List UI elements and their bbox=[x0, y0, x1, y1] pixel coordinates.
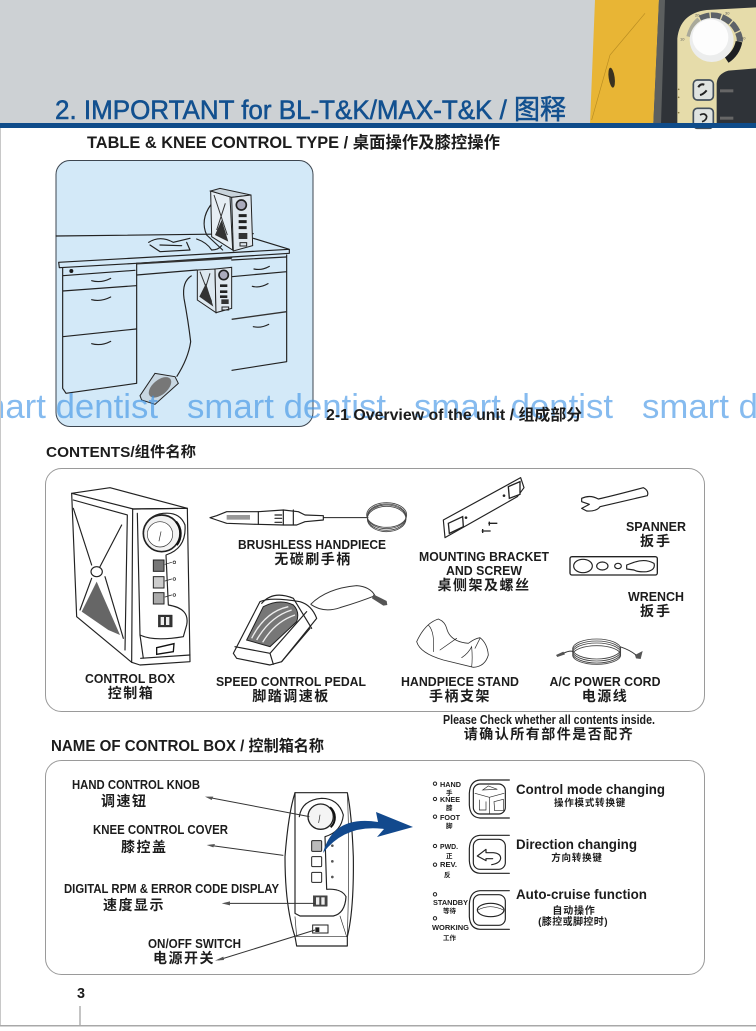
label: mounting bracket: MOUNTING BRACKET bbox=[419, 550, 549, 564]
note: check contents bbox=[443, 713, 655, 742]
handpiece drawing bbox=[210, 503, 407, 532]
label: spanner: SPANNER bbox=[626, 520, 686, 534]
control mode changing group: Control mode changing bbox=[516, 782, 665, 797]
label: power cord bbox=[550, 675, 660, 704]
indicators bbox=[433, 782, 437, 818]
label: on/off switch bbox=[148, 937, 241, 966]
pedal drawing bbox=[233, 586, 387, 665]
label: hand control knob: HAND CONTROL KNOB bbox=[72, 778, 200, 792]
header band bbox=[0, 0, 756, 128]
icon: auto-cruise button bbox=[469, 891, 509, 929]
auto-cruise function group: 工作 bbox=[443, 933, 456, 942]
panel: name of control box bbox=[46, 760, 704, 974]
control mode changing group bbox=[433, 780, 665, 830]
label: wrench: 扳手 bbox=[640, 603, 672, 619]
auto-cruise function group: Auto-cruise function bbox=[516, 887, 647, 902]
control mode changing group: 操作模式转换键 bbox=[554, 797, 626, 809]
label: wrench: WRENCH bbox=[628, 590, 684, 604]
direction changing group: PWD. bbox=[440, 842, 458, 851]
photo of control unit: 20 bbox=[695, 13, 700, 18]
label: power cord: A/C POWER CORD bbox=[550, 675, 660, 689]
heading: contents: CONTENTS/组件名称 bbox=[46, 443, 197, 461]
label: hand control knob: 调速钮 bbox=[101, 793, 148, 809]
power cord drawing bbox=[556, 639, 643, 664]
label: knee control cover: 膝控盖 bbox=[121, 839, 168, 855]
control box drawing bbox=[72, 488, 190, 665]
label: handpiece stand bbox=[401, 675, 519, 704]
label: speed control pedal bbox=[216, 675, 366, 704]
icon: control mode button bbox=[469, 780, 509, 818]
page number: 3 bbox=[77, 985, 85, 1002]
label: digital display: 速度显示 bbox=[103, 897, 165, 913]
direction changing group: REV. bbox=[440, 860, 457, 869]
blue rule bbox=[0, 123, 756, 128]
label: power cord: 电源线 bbox=[582, 688, 628, 704]
auto-cruise function group: STANDBY bbox=[433, 898, 468, 907]
label: on/off switch: 电源开关 bbox=[153, 950, 215, 966]
label: knee control cover bbox=[93, 823, 228, 855]
title: 2. IMPORTANT for BL-T&K/MAX-T&K / 图释 bbox=[55, 95, 566, 125]
label: spanner bbox=[626, 520, 686, 549]
auto-cruise function group: WORKING bbox=[432, 923, 469, 932]
auto-cruise function group: 自动操作 bbox=[552, 904, 596, 917]
photo of control unit: 30 bbox=[725, 11, 730, 16]
photo of control unit: 10 bbox=[680, 37, 685, 42]
handpiece on desk bbox=[149, 238, 222, 252]
direction changing group: 方向转换键 bbox=[551, 852, 603, 864]
label: control box: CONTROL BOX bbox=[85, 672, 176, 686]
auto-cruise function group: (膝控或脚控时) bbox=[538, 915, 608, 928]
watermark bbox=[0, 388, 756, 426]
control mode changing group: 手 bbox=[446, 788, 453, 797]
control mode changing group: 脚 bbox=[446, 821, 453, 830]
control mode changing group: FOOT bbox=[440, 813, 460, 822]
label: handpiece stand: 手柄支架 bbox=[429, 688, 491, 704]
label: mounting bracket bbox=[419, 550, 549, 593]
direction changing group: 反 bbox=[444, 870, 451, 879]
control mode changing group: 膝 bbox=[446, 803, 453, 812]
label: control box: 控制箱 bbox=[108, 685, 154, 701]
direction changing group: Direction changing bbox=[516, 837, 637, 852]
label: knee control cover: KNEE CONTROL COVER bbox=[93, 823, 228, 837]
label: mounting bracket: 桌侧架及螺丝 bbox=[438, 577, 530, 593]
control box on desk bbox=[204, 188, 253, 251]
watermark: smart dentist bbox=[414, 388, 614, 426]
label: mounting bracket: AND SCREW bbox=[446, 564, 522, 578]
photo of control unit bbox=[590, 0, 756, 128]
heading: table and knee control type: TABLE & KNEE CONTROL TYPE / 桌面操作及膝控操作 bbox=[87, 133, 500, 152]
direction changing group: 正 bbox=[446, 852, 453, 860]
control mode changing group: KNEE bbox=[440, 795, 460, 804]
icon: direction button bbox=[469, 835, 509, 873]
label: handpiece stand: HANDPIECE STAND bbox=[401, 675, 519, 689]
label: digital display: DIGITAL RPM & ERROR CODE DISPLAY bbox=[64, 882, 280, 896]
label: speed control pedal: 脚踏调速板 bbox=[252, 688, 330, 704]
label: wrench bbox=[628, 590, 684, 619]
label: brushless handpiece bbox=[238, 538, 386, 567]
desk bbox=[56, 234, 289, 393]
pointer lines bbox=[205, 797, 315, 961]
label: digital display bbox=[64, 882, 280, 913]
control box front view bbox=[285, 793, 353, 946]
arrow: to function list bbox=[323, 812, 413, 853]
label: on/off switch: ON/OFF SWITCH bbox=[148, 937, 241, 951]
label: control box bbox=[85, 672, 176, 701]
label: speed control pedal: SPEED CONTROL PEDAL bbox=[216, 675, 366, 689]
heading: overview: 2-1 Overview of the unit / 组成部分 bbox=[326, 405, 583, 424]
label: brushless handpiece: 无碳刷手柄 bbox=[274, 551, 352, 567]
panel: contents bbox=[46, 468, 704, 712]
mounting bracket and screw drawing bbox=[443, 478, 524, 538]
note: check contents: Please Check whether all contents inside. bbox=[443, 713, 655, 727]
note: check contents: 请确认所有部件是否配齐 bbox=[464, 726, 634, 742]
heading: name of control box: NAME OF CONTROL BOX / 控制箱名称 bbox=[51, 736, 324, 755]
direction changing group bbox=[433, 835, 637, 879]
label: hand control knob bbox=[72, 778, 200, 809]
control box under desk bbox=[197, 267, 232, 313]
label: brushless handpiece: BRUSHLESS HANDPIECE bbox=[238, 538, 386, 552]
control mode changing group: HAND bbox=[440, 780, 462, 789]
label: spanner: 扳手 bbox=[640, 533, 672, 549]
foot pedal and cable bbox=[140, 276, 192, 404]
panel: desk illustration bbox=[56, 160, 313, 426]
photo of control unit: 40 bbox=[741, 35, 746, 40]
handpiece stand drawing bbox=[417, 619, 488, 667]
auto-cruise function group: 等待 bbox=[443, 906, 456, 915]
spanner drawing bbox=[582, 488, 648, 511]
watermark: smart dentist bbox=[187, 388, 387, 426]
auto-cruise function group bbox=[432, 887, 647, 942]
wrench drawing bbox=[570, 557, 657, 575]
